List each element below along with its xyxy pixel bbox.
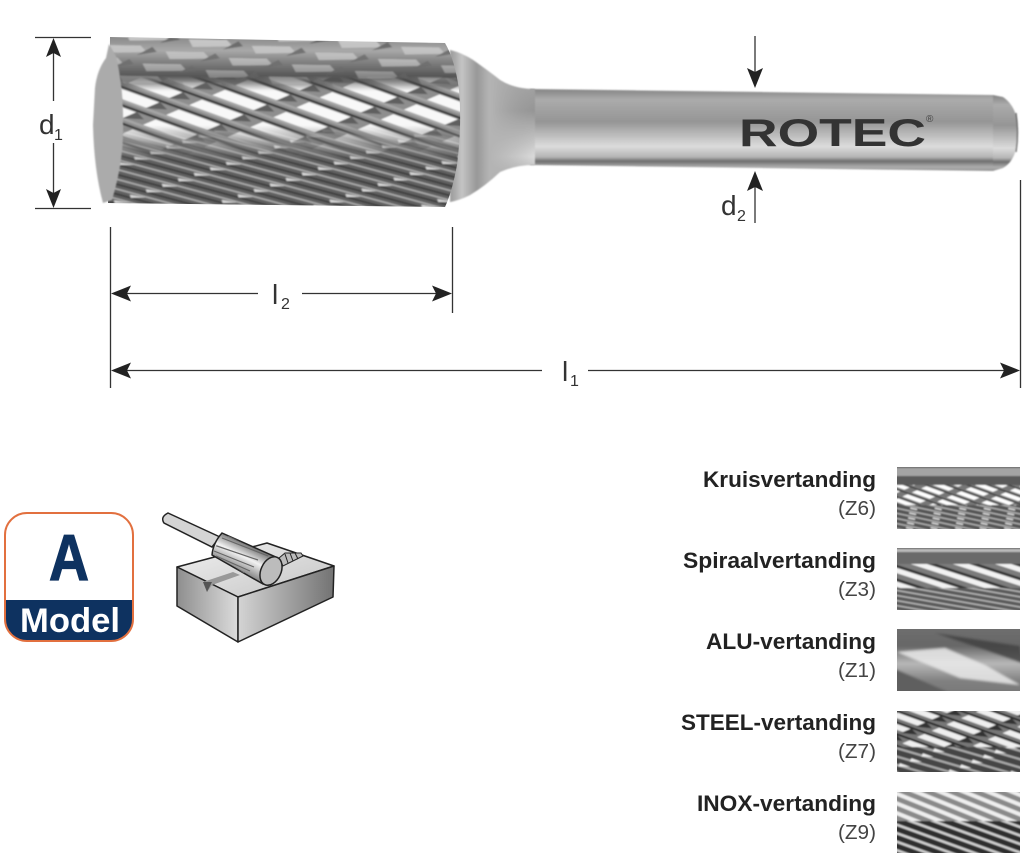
dimension l1: 1	[570, 373, 579, 390]
row: ALU-vertanding: ALU-vertanding	[706, 629, 876, 654]
dimension d1: 1	[54, 127, 63, 144]
badge: Model A: Model	[20, 602, 120, 640]
row: Spiraalvertanding: (Z3)	[838, 579, 876, 601]
dimension d2: 2	[737, 208, 746, 225]
thumbnail: Z9 teeth	[895, 790, 1022, 853]
neck	[450, 50, 535, 202]
thumbnail: Z6 teeth	[895, 465, 1022, 531]
row: Kruisvertanding: Kruisvertanding	[703, 467, 876, 492]
dimension l1: l	[562, 356, 568, 387]
cutting head	[108, 37, 460, 207]
dimension l2: l	[272, 279, 278, 310]
product photo: cylindrical carbide bur	[93, 30, 1018, 215]
dimension l2: 2	[281, 296, 290, 313]
row: ALU-vertanding: (Z1)	[838, 660, 876, 682]
logo: ROTEC	[739, 112, 926, 155]
shank	[530, 89, 1018, 171]
badge: Model A	[4, 513, 134, 642]
row: INOX-vertanding: INOX-vertanding	[697, 791, 876, 816]
thumbnail: Z7 teeth	[895, 709, 1022, 774]
icon: bur cutting a workpiece	[163, 513, 334, 642]
thumbnail: Z1 teeth	[897, 629, 1020, 691]
cutting head end face	[93, 44, 123, 203]
logo registered mark: ®	[926, 114, 934, 125]
row: STEEL-vertanding: (Z7)	[838, 741, 876, 763]
row: Spiraalvertanding: Spiraalvertanding	[683, 548, 876, 573]
row: STEEL-vertanding: STEEL-vertanding	[681, 710, 876, 735]
row: INOX-vertanding: (Z9)	[838, 822, 876, 844]
dimension d2	[721, 36, 763, 225]
dimension l1	[111, 180, 1020, 390]
row: INOX-vertanding	[697, 790, 1022, 853]
row: Spiraalvertanding	[683, 546, 1022, 612]
row: ALU-vertanding	[706, 629, 1020, 691]
row: Kruisvertanding	[703, 465, 1022, 531]
row: Kruisvertanding: (Z6)	[838, 498, 876, 520]
row: STEEL-vertanding	[681, 709, 1022, 774]
dimension l2	[110, 227, 452, 388]
thumbnail: Z3 teeth	[895, 546, 1022, 612]
dimension d1	[35, 38, 91, 208]
dimension d2: d	[721, 190, 737, 221]
dimension d1: d	[39, 109, 55, 140]
badge: Model A: A	[49, 521, 89, 594]
